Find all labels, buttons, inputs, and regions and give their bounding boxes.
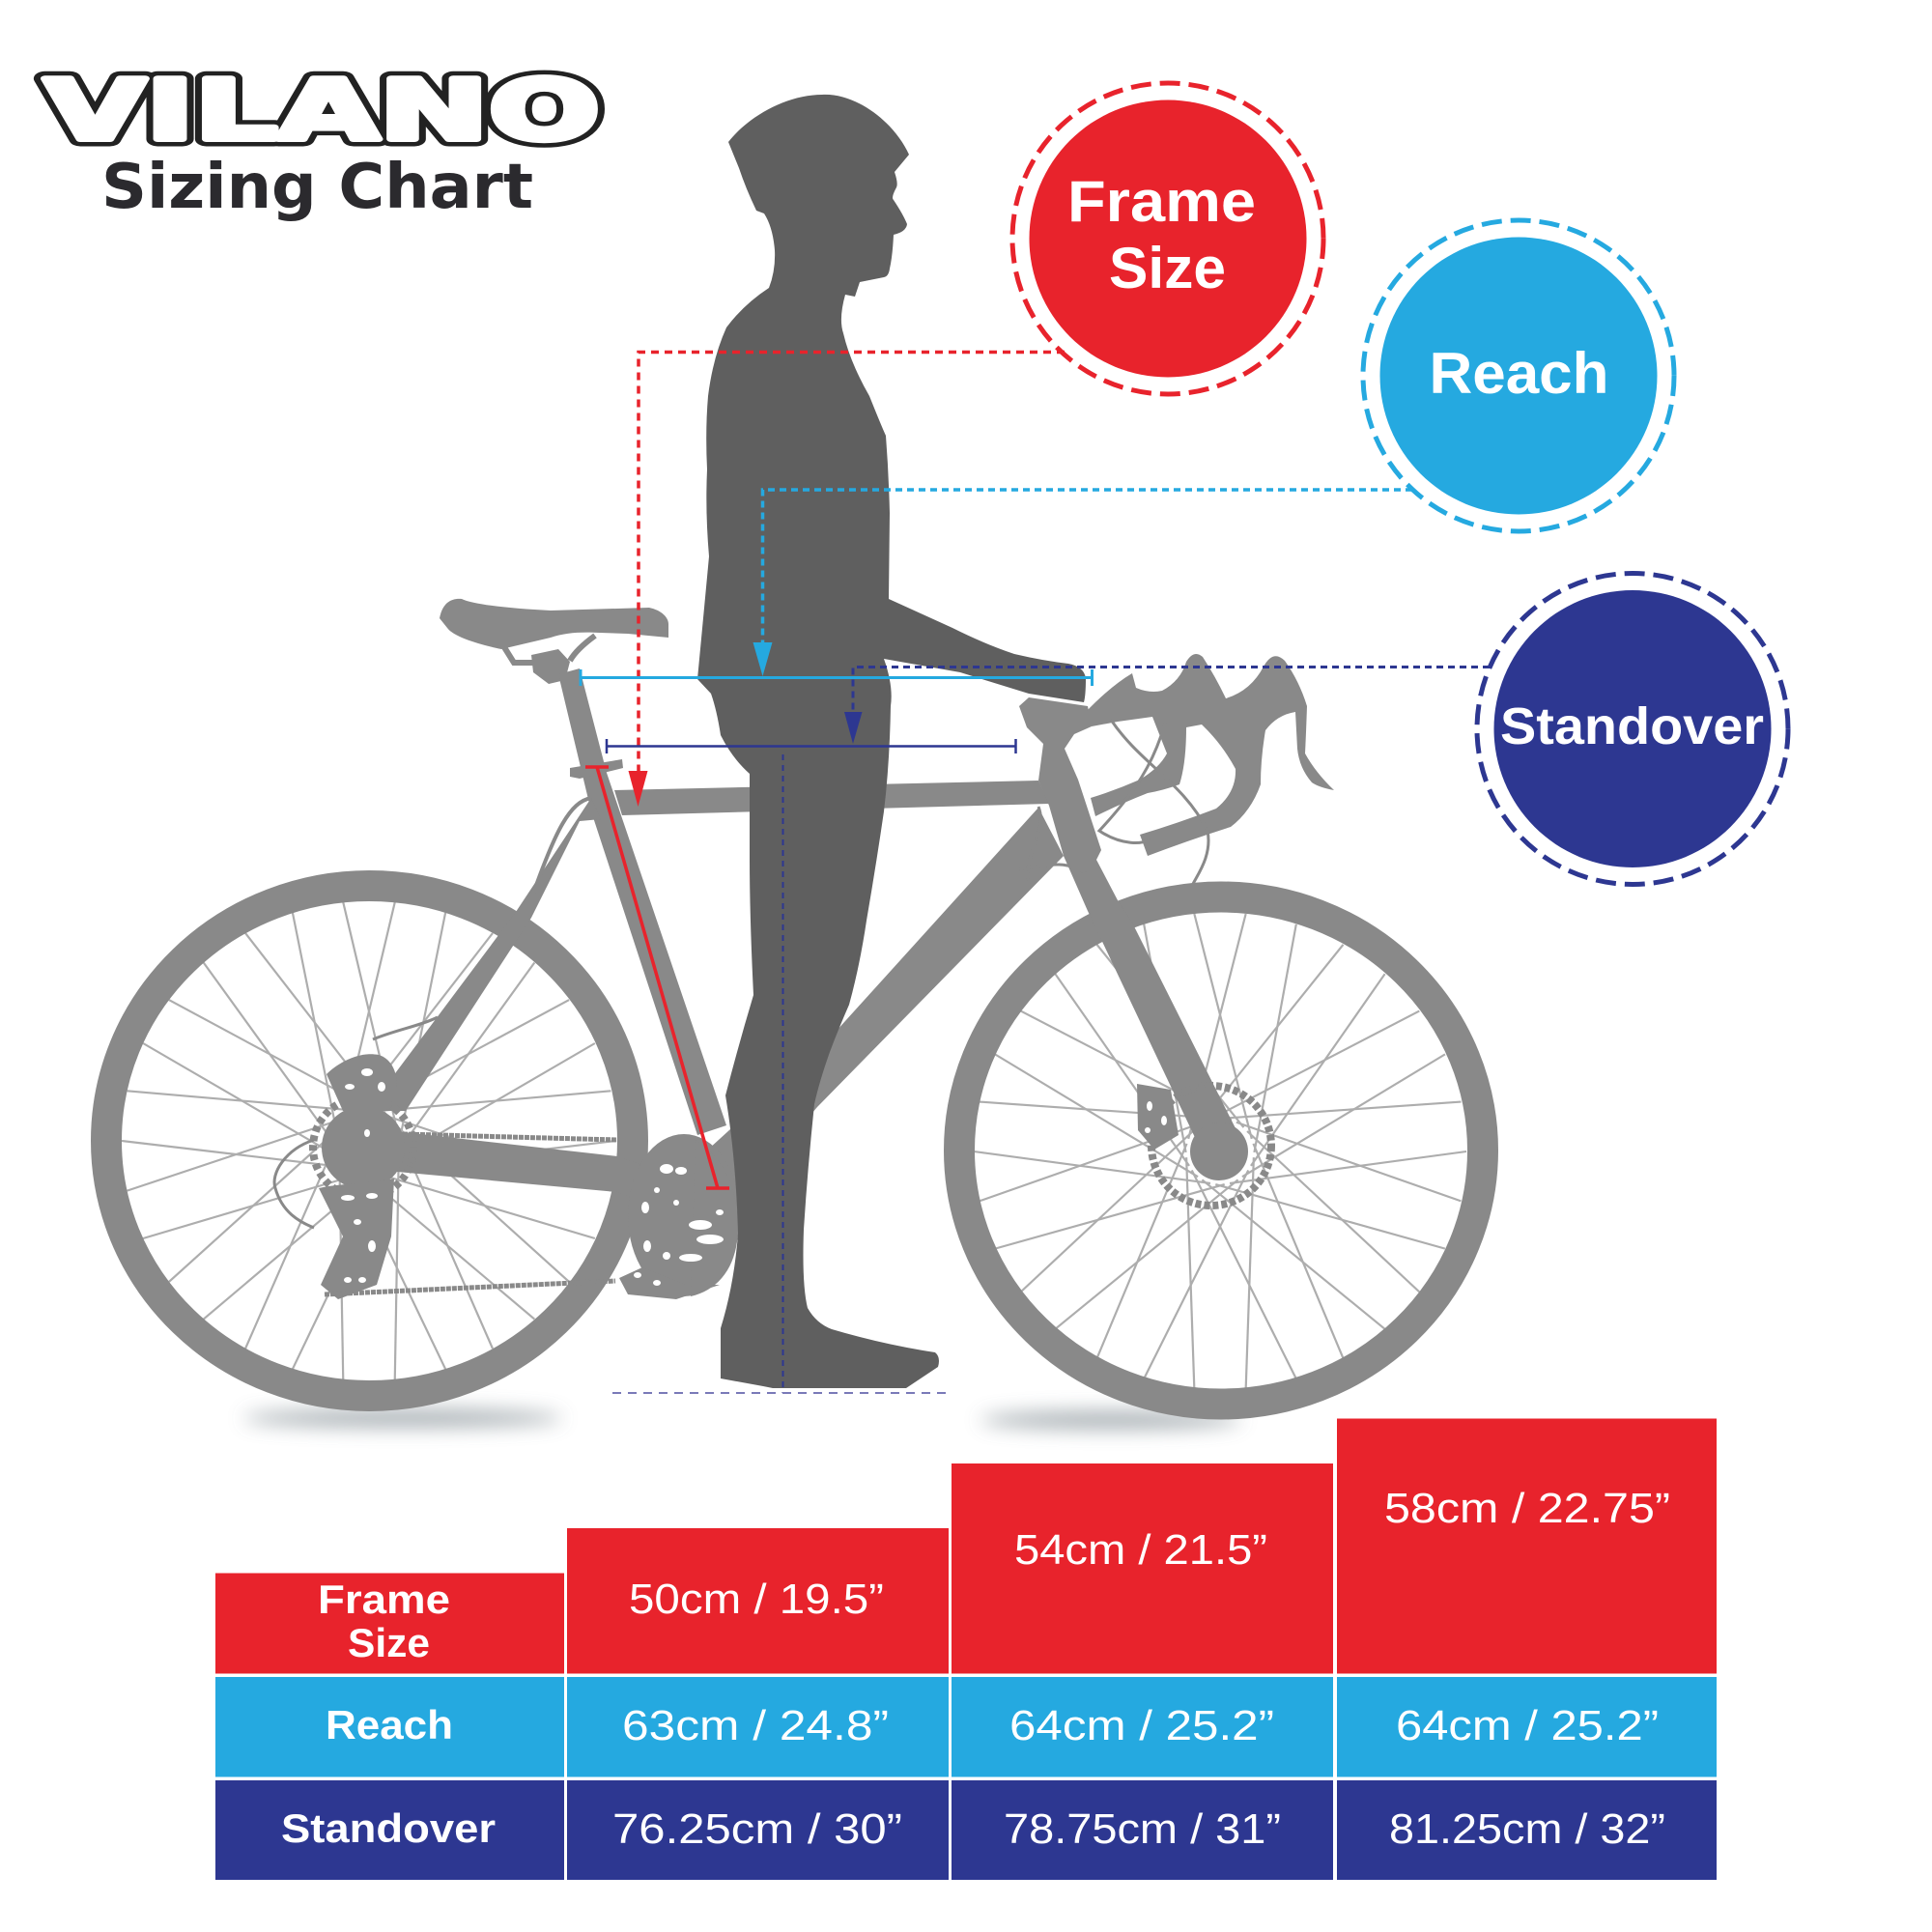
row: Reach (215, 1677, 1717, 1777)
row: Standover: 78.75cm / 31” (1004, 1805, 1281, 1853)
saddle (440, 599, 668, 649)
standover measurement: navy line and arrow (607, 667, 1490, 1393)
frame size measurement: red line and arrow (585, 352, 1065, 1188)
top tube (614, 781, 1049, 815)
badge: Standover: Standover (1500, 697, 1764, 755)
row: Frame Size: 50cm / 19.5” (629, 1576, 884, 1623)
down tube (676, 808, 1064, 1227)
row: Frame Size: 58cm / 22.75” (1384, 1485, 1670, 1532)
row: Standover: Standover (281, 1805, 496, 1851)
badge: Reach (1363, 220, 1674, 531)
chainring (619, 1134, 740, 1299)
front disc brake (1137, 1084, 1271, 1206)
row: Reach: Reach (326, 1702, 453, 1747)
logo: Vilano: VILANO (44, 63, 600, 159)
row: Reach: 64cm / 25.2” (1009, 1702, 1274, 1749)
row: Standover: 76.25cm / 30” (612, 1805, 902, 1853)
row: Frame Size (215, 1418, 1717, 1673)
seat stay (367, 798, 601, 1111)
rear wheel (106, 886, 633, 1396)
row: Standover: 81.25cm / 32” (1389, 1805, 1665, 1853)
badge: Frame Size: Frame (1067, 169, 1256, 234)
reach measurement: blue line and arrow (581, 490, 1412, 686)
row: Frame Size: Size (348, 1620, 430, 1665)
title: Sizing Chart: Sizing Chart (101, 152, 533, 223)
bicycle silhouette (106, 599, 1483, 1405)
row: Frame Size: Frame (318, 1577, 450, 1622)
brake cables (1019, 720, 1208, 884)
front wheel (959, 896, 1483, 1405)
logo: Vilano: VILANO (44, 63, 600, 159)
row: Frame Size: 54cm / 21.5” (1014, 1526, 1267, 1574)
seat post and seat tube (558, 668, 726, 1135)
seat clamp (570, 759, 623, 779)
row: Standover (215, 1780, 1717, 1880)
badge: Standover (1477, 574, 1788, 885)
sizing table (215, 1418, 1717, 1880)
head tube, stem and fork (1019, 697, 1241, 1164)
row: Reach: 64cm / 25.2” (1396, 1702, 1659, 1749)
row: Reach: 63cm / 24.8” (622, 1702, 889, 1749)
rider silhouette (697, 95, 1086, 1388)
ground shadows (243, 1409, 1241, 1429)
badge: Frame Size: Size (1109, 236, 1226, 300)
badge: Frame Size (1012, 83, 1323, 394)
handlebar, hoods and brake levers (1086, 654, 1334, 856)
badge: Reach: Reach (1430, 341, 1609, 406)
cassette, caliper and derailleur (274, 1017, 617, 1299)
logo: Vilano (44, 63, 600, 159)
saddle rails and clamp (504, 636, 595, 663)
chain stay (386, 1130, 696, 1222)
